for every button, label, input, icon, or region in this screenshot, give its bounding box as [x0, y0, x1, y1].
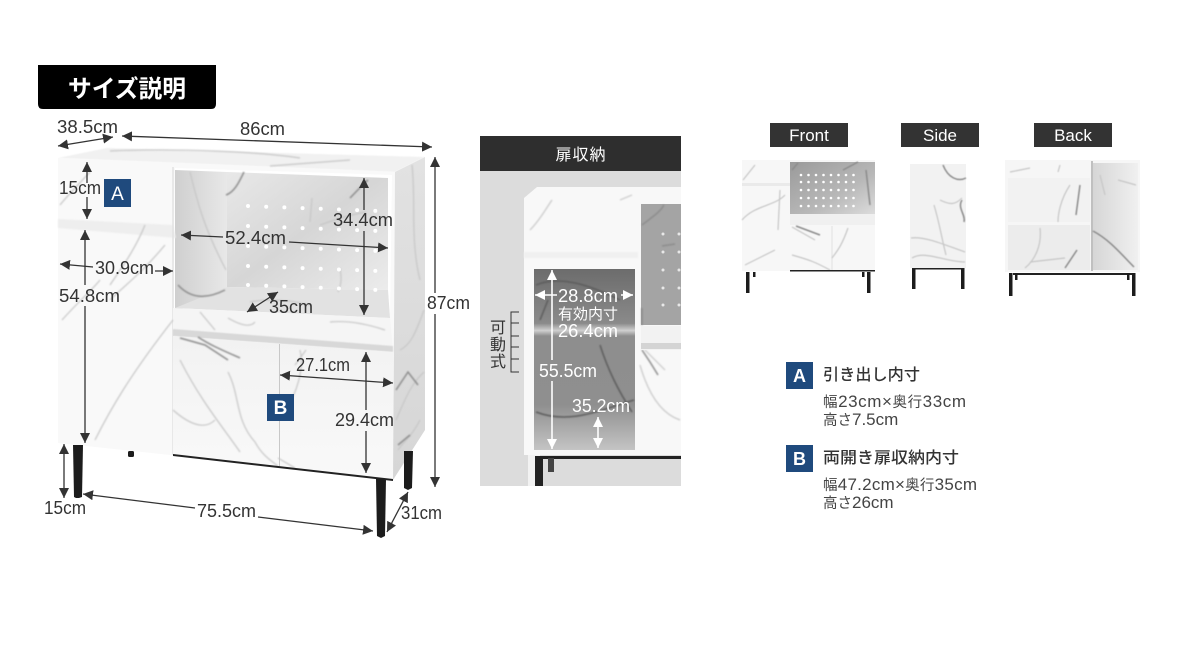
dimension: width 86cm: [122, 119, 432, 147]
adjustable shelf label: 動: [490, 336, 506, 354]
panel heading: [480, 136, 681, 171]
dimension: height 87cm: 87cm: [427, 293, 470, 313]
open cubby with pegboard: [173, 168, 392, 318]
dimension: leg span 75.5cm: [83, 494, 373, 531]
legend A: drawer inner dimensions: 高さ7.5cm: [823, 410, 898, 429]
badge A: A: [111, 184, 124, 205]
cabinet top surface: [58, 148, 425, 172]
panel: back view: [1005, 123, 1140, 296]
dimension: cubby width 52.4cm: [181, 228, 388, 248]
dimension: door height 29.4cm: 29.4cm: [335, 410, 394, 430]
title: size description: サイズ説明: [68, 75, 186, 103]
panel: front view: [742, 123, 875, 293]
dimension: lower height 35.2cm: [572, 396, 630, 448]
legend A: drawer inner dimensions: 幅23cm×奥行33cm: [823, 392, 966, 411]
cabinet side panel: [393, 157, 425, 480]
legend B: double door storage inner dimensions: 両開き扉収納内寸: [823, 449, 959, 467]
adjustable shelf label: [490, 312, 519, 372]
back label: Back: [1054, 126, 1092, 145]
main cabinet illustration: [58, 148, 425, 538]
dimension: door width 27.1cm: [280, 355, 393, 383]
pegboard holes: [248, 206, 380, 290]
panel: side view: [901, 123, 979, 289]
dimension: door width 30.9cm: [60, 258, 173, 278]
dimension: cubby depth 35cm: 35cm: [269, 297, 313, 317]
dimension: cubby height 34.4cm: [333, 178, 393, 315]
close-up legs: [535, 456, 681, 486]
adjustable shelf label: 式: [490, 353, 506, 371]
front cabinet thumbnail: [742, 160, 875, 293]
dimension: door width 27.1cm: 27.1cm: [296, 355, 350, 375]
close-up right cubby: [641, 204, 681, 350]
legend A: drawer inner dimensions: A: [793, 366, 806, 386]
open door storage niche: [534, 269, 635, 450]
dimension: door height 54.8cm: 54.8cm: [59, 286, 120, 306]
dimension: cubby width 52.4cm: 52.4cm: [225, 228, 286, 248]
shelf front: [173, 308, 393, 350]
legend B: double door storage inner dimensions: [786, 445, 977, 512]
badge A: [104, 179, 131, 207]
panel photo background: [480, 171, 681, 486]
side cabinet thumbnail: [910, 164, 966, 289]
effective inner size 26.4cm: [558, 306, 618, 341]
marble veins on the front: [60, 150, 385, 468]
front label: [770, 123, 848, 147]
title: size description: [38, 65, 216, 109]
effective inner size 26.4cm: 26.4cm: [558, 321, 618, 341]
lower doors: [173, 336, 393, 479]
dimension: cubby height 34.4cm: 34.4cm: [333, 210, 393, 230]
dimension: inner width 28.8cm: 28.8cm: [558, 286, 618, 306]
dimension: inner width 28.8cm: [535, 286, 633, 306]
dimension: leg depth 31cm: 31cm: [401, 503, 442, 523]
panel heading: 扉収納: [555, 146, 607, 164]
back cabinet thumbnail: [1005, 160, 1140, 296]
dimension: leg height 15cm: [44, 444, 86, 518]
legend B: double door storage inner dimensions: 高さ26cm: [823, 493, 894, 512]
close-up cabinet body: [524, 187, 681, 486]
side label: Side: [923, 126, 957, 145]
badge B: B: [274, 398, 287, 419]
dimension: depth 38.5cm: 38.5cm: [57, 117, 118, 137]
dimension: leg depth 31cm: [387, 492, 442, 532]
legend A: drawer inner dimensions: 引き出し内寸: [823, 366, 920, 384]
effective inner size 26.4cm: 有効内寸: [558, 306, 618, 323]
left drawer and door seams: [58, 167, 176, 455]
side label: [901, 123, 979, 147]
dimension: cubby depth 35cm: [247, 292, 313, 317]
dimension: depth 38.5cm: [57, 117, 118, 146]
cabinet front body: [58, 158, 395, 479]
dimension: inner height 55.5cm: 55.5cm: [539, 361, 597, 381]
adjustable shelf label: 可: [490, 320, 506, 337]
badge B: [267, 394, 294, 421]
cabinet legs: [73, 445, 413, 538]
legend A: drawer inner dimensions: [786, 362, 966, 429]
back label: [1034, 123, 1112, 147]
dimension: width 86cm: 86cm: [240, 119, 285, 139]
dimension: drawer 15cm: 15cm: [59, 178, 101, 198]
dimension: leg span 75.5cm: 75.5cm: [197, 501, 256, 521]
dimension: drawer 15cm: [59, 162, 101, 219]
legend B: double door storage inner dimensions: B: [793, 449, 806, 469]
dimension: lower height 35.2cm: 35.2cm: [572, 396, 630, 416]
dimension: door height 29.4cm: [335, 352, 394, 473]
dimension: door width 30.9cm: 30.9cm: [95, 258, 154, 278]
legend B: double door storage inner dimensions: 幅47.2cm×奥行35cm: [823, 475, 977, 494]
front label: Front: [789, 126, 829, 145]
dimension: leg height 15cm: 15cm: [44, 498, 86, 518]
panel: door storage detail: [480, 136, 681, 486]
